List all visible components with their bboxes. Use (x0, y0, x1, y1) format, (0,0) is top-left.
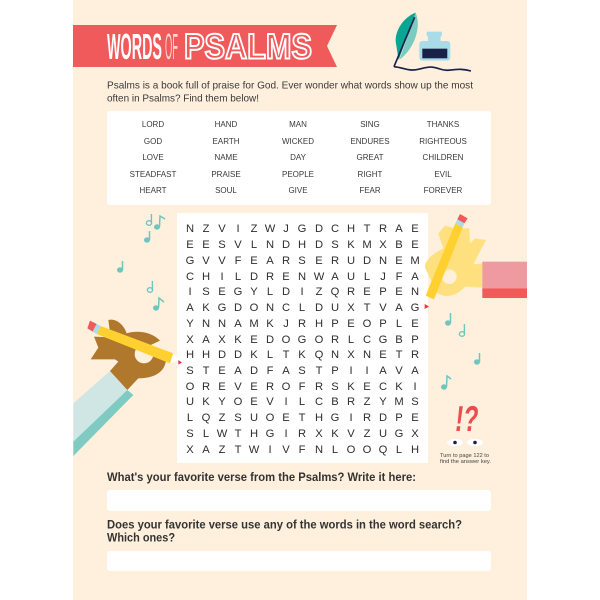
intro text (107, 80, 473, 104)
panel: word list: DAY (290, 153, 307, 162)
icon: eyes (447, 439, 483, 446)
icon: music notes (117, 214, 480, 390)
panel: word list: NAME (214, 153, 238, 162)
answer key note: Turn to page 122 to (440, 453, 489, 459)
panel: word list: ENDURES (350, 137, 390, 146)
panel: word list: HEART (140, 186, 167, 195)
panel: word list: FEAR (359, 186, 381, 195)
answer key note: find the answer key. (440, 459, 491, 465)
panel: word list: LORD (142, 120, 164, 129)
panel: word search grid: SLWTHGIRXKVZUGX (186, 428, 419, 440)
panel: word list: GOD (144, 137, 162, 146)
answer box 1 (107, 490, 491, 511)
panel: word list: WICKED (282, 137, 314, 146)
panel: word list: HAND (215, 120, 238, 129)
intro text: often in Psalms? Find them below! (107, 94, 259, 104)
panel: word search grid: YNNAMKJRHPEOPLE (186, 318, 419, 330)
panel: word list: RIGHTEOUS (419, 137, 467, 146)
panel: word list: PEOPLE (282, 170, 314, 179)
panel: word search grid (177, 213, 428, 463)
panel: word search grid: NZVIZWJGDCHTRAE (186, 223, 419, 235)
panel: word list: STEADFAST (130, 170, 176, 179)
panel: word list: SOUL (215, 186, 237, 195)
panel: word list: PRAISE (211, 170, 241, 179)
question 2: Which ones? (107, 532, 175, 544)
panel: word search grid: OREVEROFRSKECKI (186, 381, 417, 393)
question 2 (107, 520, 462, 544)
icon: quill and ink bottle (394, 13, 471, 71)
title banner: WORDS (107, 26, 162, 67)
panel: word list: FOREVER (424, 186, 463, 195)
panel: word search grid: EESVLNDHDSKMXBE (186, 239, 419, 251)
icon: right hand with pencil (425, 214, 527, 309)
panel: word search grid: ISEGYLDIZQREPEN (188, 286, 419, 298)
answer key note (440, 453, 491, 465)
panel: word list: GREAT (357, 153, 384, 162)
panel: word search grid: XAXKEDOGORLCGBP (186, 334, 419, 346)
panel: word search grid: CHILDRENWAULJFA (186, 271, 419, 283)
intro text: Psalms is a book full of praise for God. Ever wonder what words show up the most (107, 80, 473, 92)
question 1: What's your favorite verse from the Psalms? Write it here: (107, 472, 416, 484)
panel: word search grid: AKGDONCLDUXTVAG (186, 302, 419, 314)
panel: word list: LOVE (142, 153, 164, 162)
panel: word list: CHILDREN (423, 153, 464, 162)
title banner: OF (165, 26, 178, 67)
panel: word search grid: UKYOEVILCBRZYMS (186, 396, 419, 408)
panel: page background (73, 0, 527, 600)
icon: left hand with pencil (73, 320, 182, 456)
panel: word list: SING (360, 120, 380, 129)
panel: word list: EVIL (434, 170, 452, 179)
panel: word list: EARTH (213, 137, 240, 146)
title banner (73, 25, 337, 67)
panel: word list: MAN (289, 120, 307, 129)
panel: word list: GIVE (288, 186, 308, 195)
panel: word list: RIGHT (358, 170, 383, 179)
question 2: Does your favorite verse use any of the words in the word search? (107, 520, 462, 532)
answer box 2 (107, 551, 491, 571)
panel: word search grid: LQZSUOETHGIRDPE (187, 412, 419, 424)
title banner: PSALMS (184, 28, 312, 66)
panel: word search grid: HHDDKLTKQNXNETR (186, 349, 419, 361)
panel: word list (107, 111, 491, 205)
panel: word search grid: STEADFASTPIIAVA (186, 365, 419, 377)
icon: exclamation and question marks: !? (453, 398, 481, 439)
panel: word list: THANKS (427, 120, 459, 129)
panel: word search grid: XAZTWIVFNLOOQLH (186, 444, 419, 456)
panel: word search grid: GVVFEARSERUDNEM (186, 255, 420, 267)
